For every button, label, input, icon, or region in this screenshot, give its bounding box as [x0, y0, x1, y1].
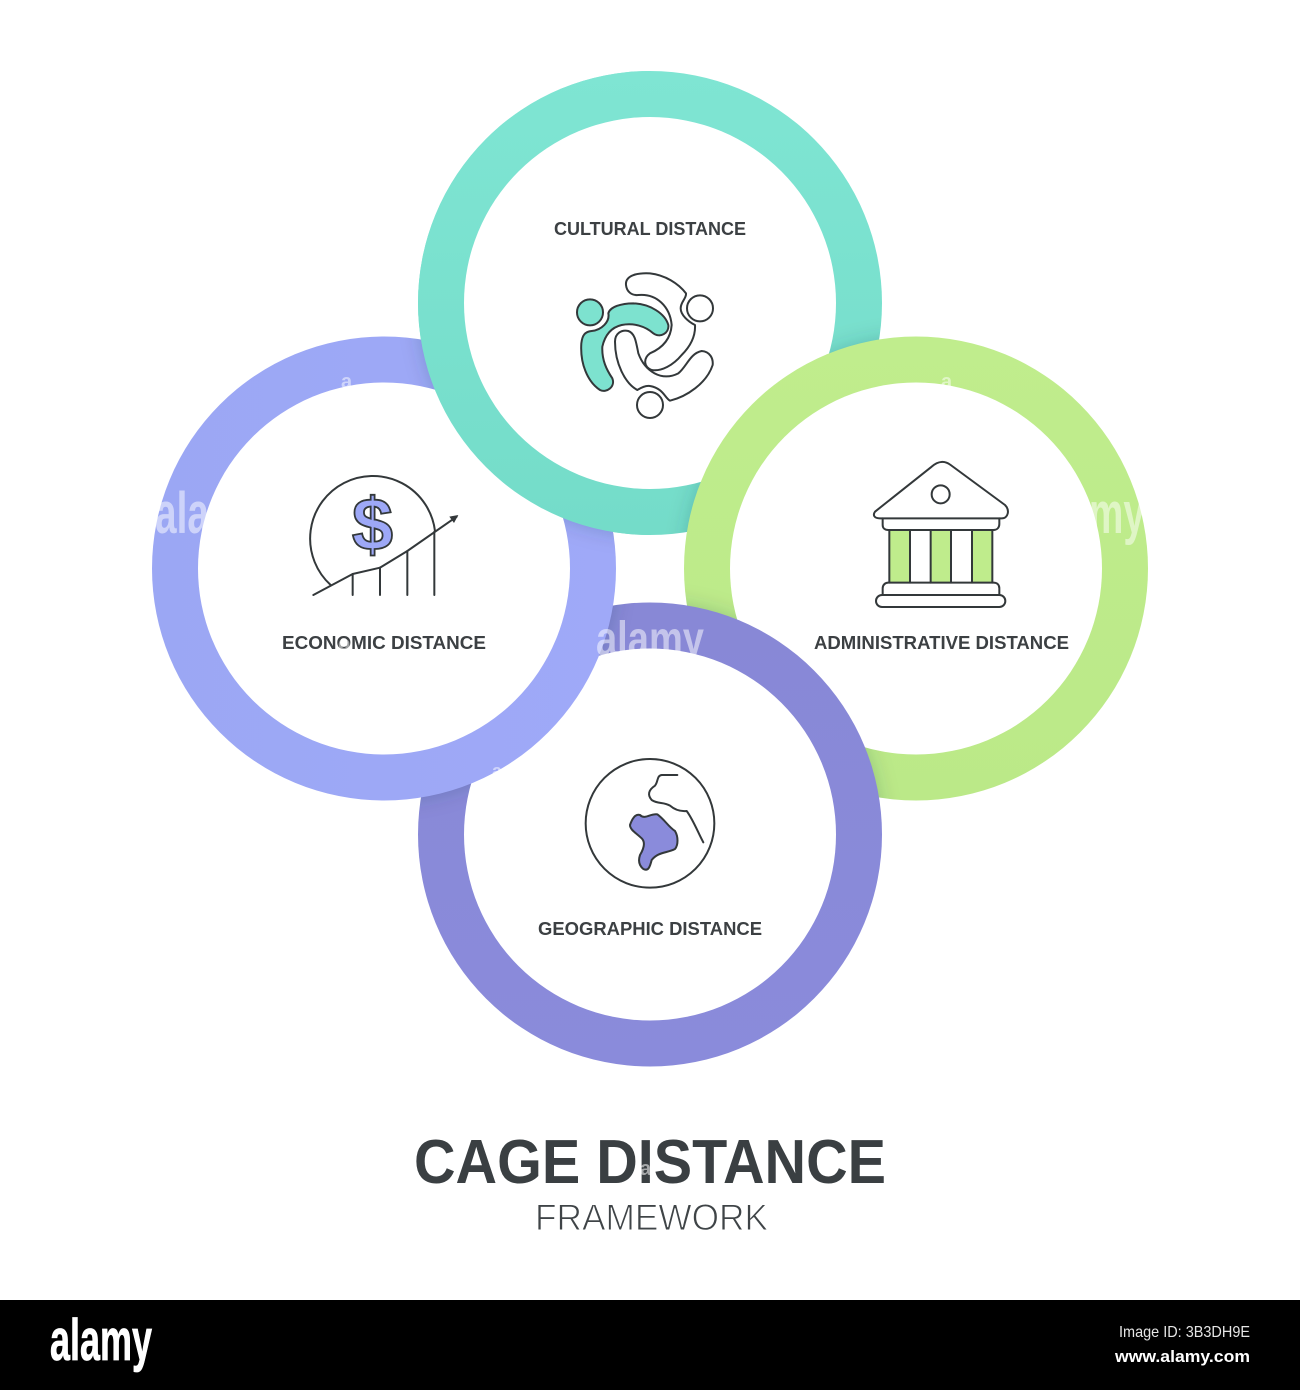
watermarks: a	[341, 371, 353, 393]
label: geographic distance: GEOGRAPHIC DISTANCE	[538, 919, 762, 939]
watermarks: a	[941, 371, 953, 393]
watermarks: a	[492, 761, 503, 781]
subtitle: FRAMEWORK	[535, 1197, 768, 1238]
title: CAGE DISTANCE	[414, 1128, 886, 1197]
footer image id: Image ID: 3B3DH9E	[1119, 1324, 1250, 1341]
watermarks: o	[338, 633, 350, 655]
icon: dollar growth chart	[310, 476, 458, 595]
ring: administrative distance	[684, 336, 1148, 800]
watermarks: alamy	[1035, 481, 1145, 546]
icon: government building	[874, 462, 1008, 607]
footer url: www.alamy.com	[1114, 1347, 1250, 1366]
label: administrative distance: ADMINISTRATIVE DISTANCE	[814, 633, 1069, 653]
icon: dollar growth chart: $	[352, 483, 393, 566]
ring: economic distance	[152, 336, 616, 800]
watermarks: a	[640, 1158, 652, 1180]
footer logo: alamy	[50, 1308, 152, 1373]
ring: cultural distance	[418, 71, 882, 535]
label: economic distance: ECONOMIC DISTANCE	[282, 633, 486, 653]
icon: globe	[586, 759, 714, 888]
ring: geographic distance	[418, 602, 882, 1066]
watermarks	[155, 371, 1145, 1180]
label: cultural distance: CULTURAL DISTANCE	[554, 219, 746, 239]
watermarks: alamy	[596, 613, 704, 666]
watermarks: alamy	[155, 481, 265, 546]
ring: cultural distance overlap over economic ring	[418, 71, 648, 535]
footer bar	[0, 1300, 1300, 1390]
icon: people circle	[577, 273, 713, 418]
